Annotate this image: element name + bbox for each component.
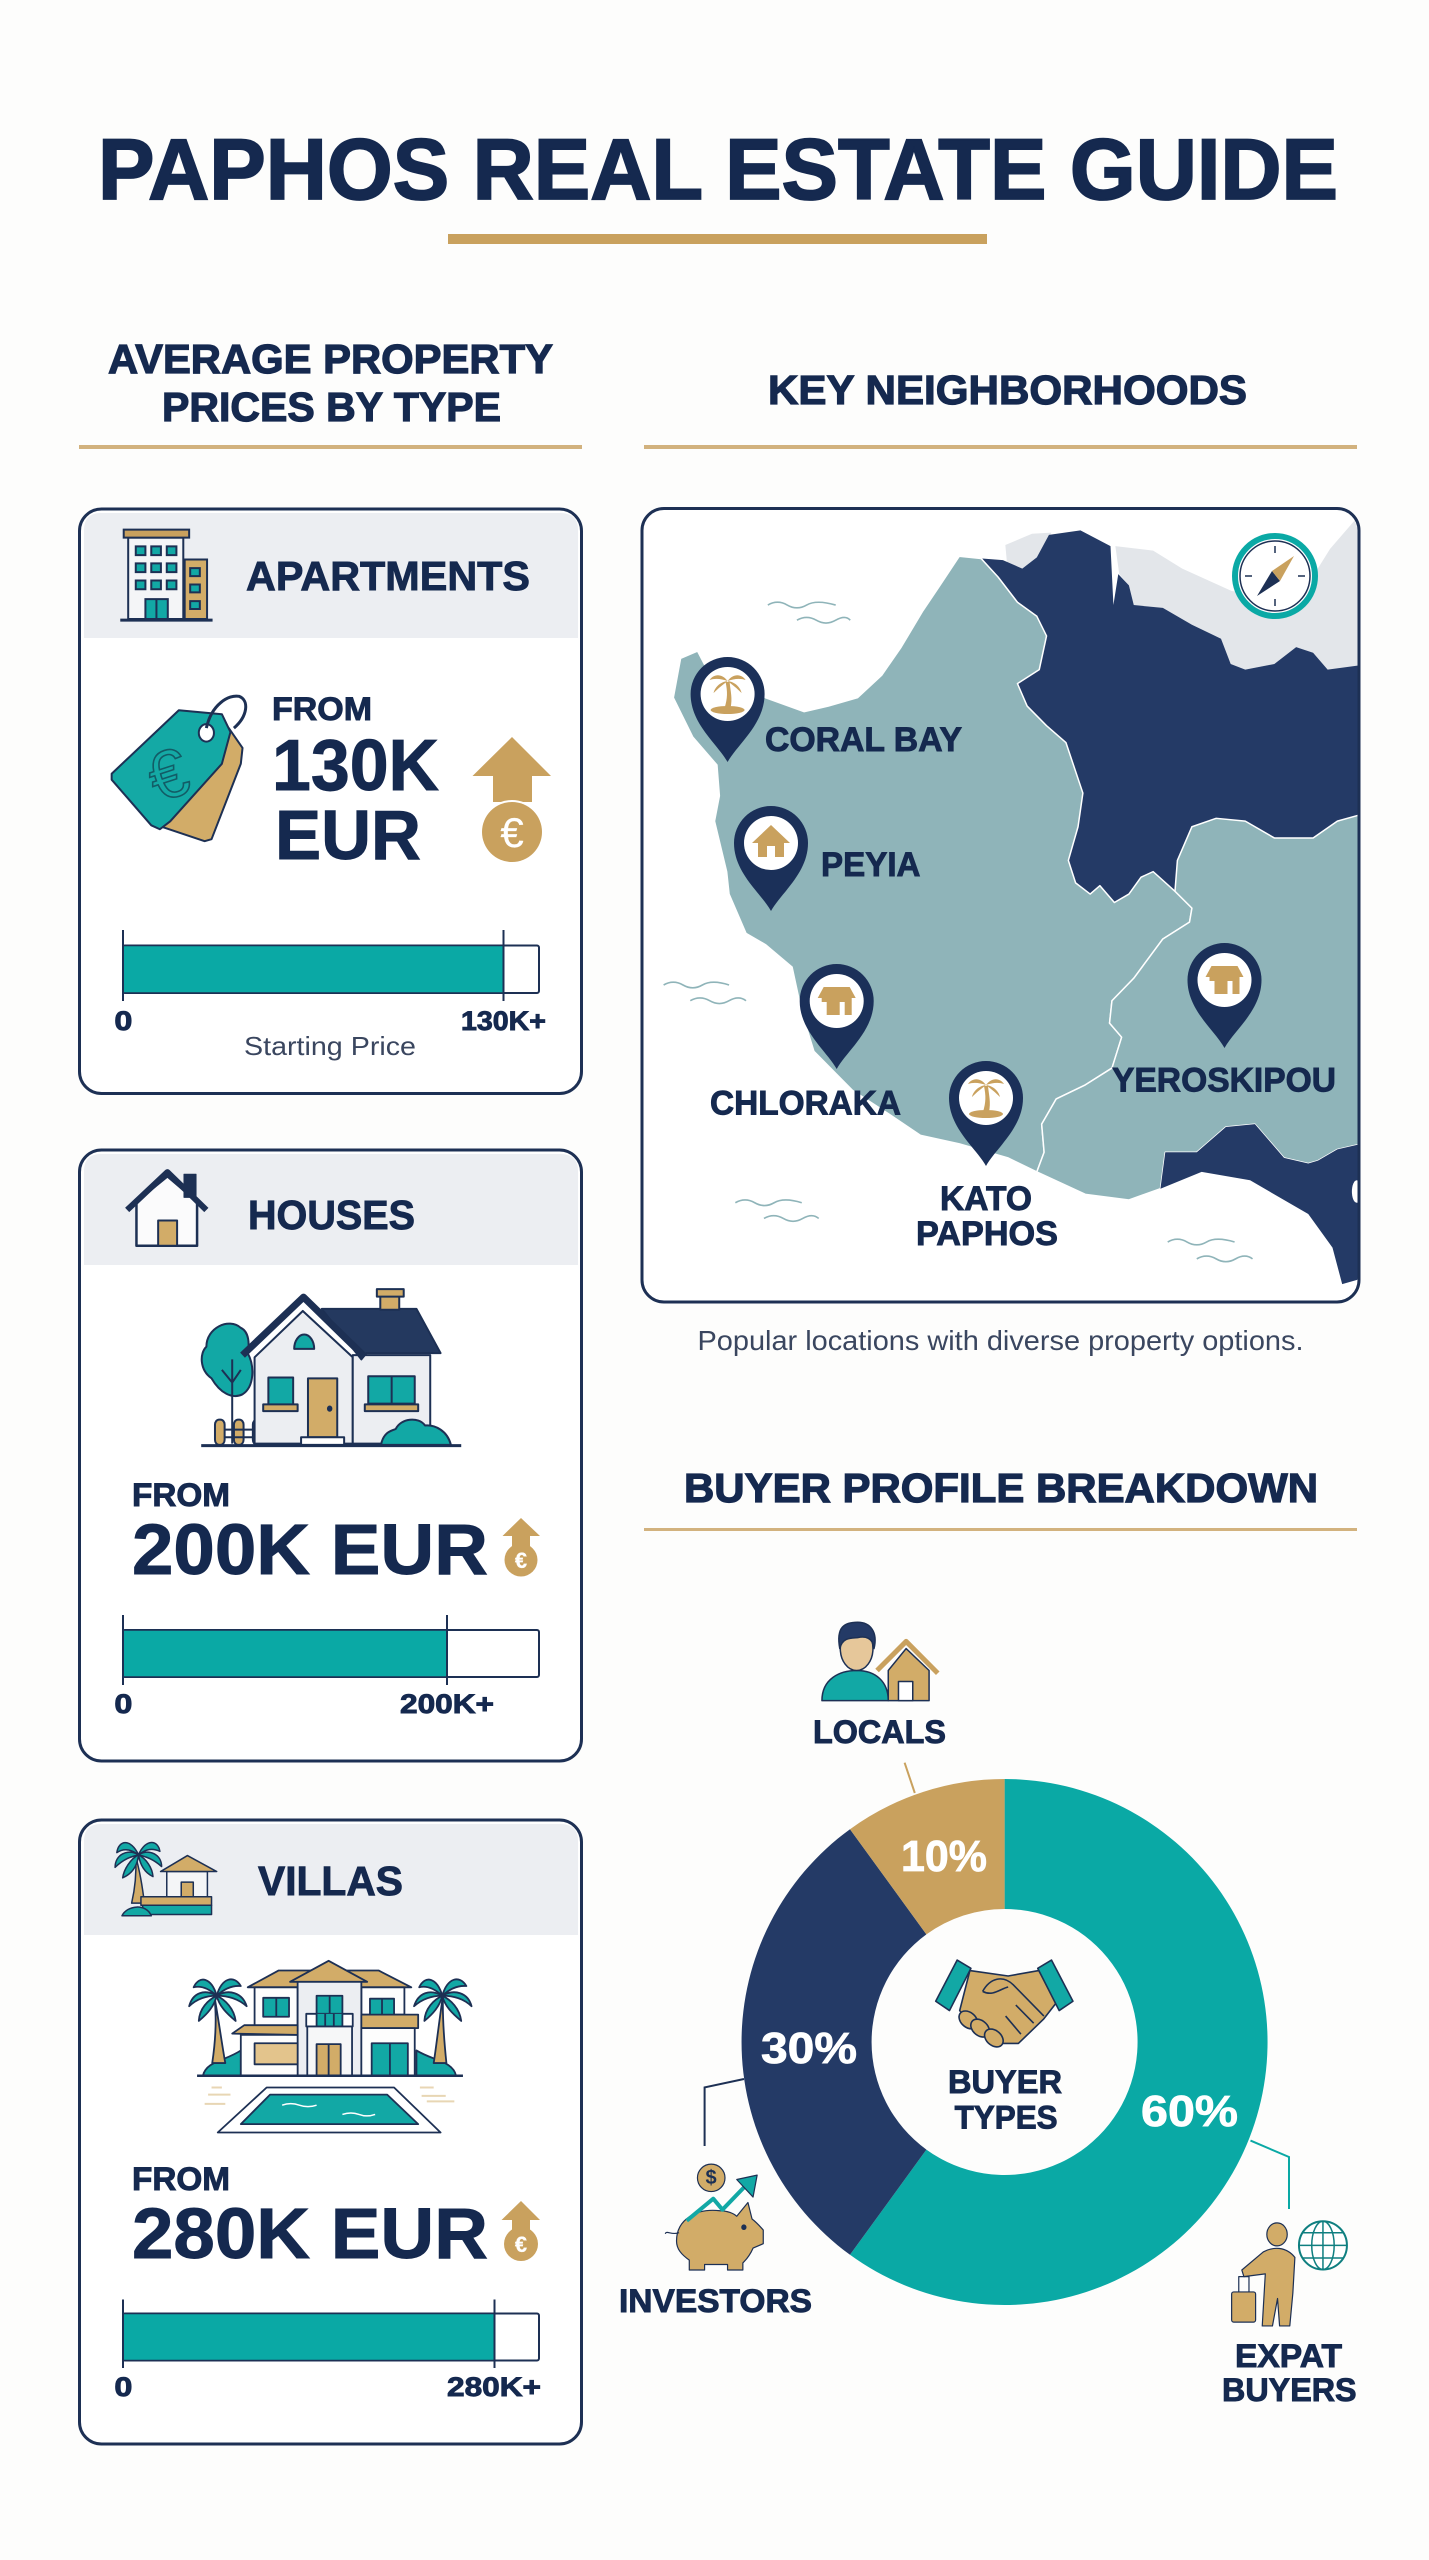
map regions — [664, 512, 1362, 1284]
panel: neighborhoods map — [642, 508, 1362, 1302]
bar chart: apartments: Starting Price — [244, 1031, 416, 1061]
percentage: 60%: 60% — [1141, 2087, 1238, 2136]
title underline — [448, 234, 987, 244]
heading: average property prices — [79, 336, 582, 449]
icon: price tags — [112, 696, 246, 841]
icon: small house — [127, 1172, 206, 1246]
price: from 200K EUR — [132, 1477, 488, 1590]
panel: villas — [80, 1820, 582, 2444]
villas label: VILLAS — [258, 1858, 403, 1904]
bar chart: villas: 0 — [114, 2372, 132, 2402]
label: kato paphos — [916, 1180, 1058, 1253]
label: peyia: PEYIA — [821, 846, 920, 884]
bar chart: apartments — [114, 930, 546, 1061]
heading: key neighborhoods: KEY NEIGHBORHOODS — [768, 367, 1247, 413]
callout: expat buyers: EXPAT — [1235, 2338, 1342, 2374]
icon: gold up arrow with euro coin — [472, 737, 551, 864]
callout: locals: LOCALS — [813, 1714, 946, 1750]
icon: traveller with suitcase and globe — [1232, 2221, 1347, 2326]
price: from 280K EUR — [132, 2161, 488, 2274]
icon: price tags: € — [139, 733, 198, 817]
percentage: 30%: 30% — [761, 2024, 857, 2073]
price: from 200K EUR: FROM — [132, 1477, 230, 1513]
houses label: HOUSES — [248, 1192, 415, 1238]
icon: small gold arrow with coin — [502, 1518, 540, 1576]
icon: apartment building — [120, 530, 213, 620]
callout: locals — [813, 1622, 946, 1793]
bar chart: houses: 200K+ — [400, 1689, 494, 1719]
price: from 280K EUR: 280K EUR — [132, 2195, 488, 2274]
callout: investors: INVESTORS — [619, 2283, 812, 2319]
icon: gold up arrow with euro coin: € — [500, 809, 524, 856]
pin: yeroskipou — [1188, 943, 1262, 1048]
bar chart: villas — [114, 2300, 541, 2402]
label: coral bay: CORAL BAY — [765, 721, 962, 759]
callout: expat buyers: BUYERS — [1222, 2372, 1357, 2408]
donut chart: buyer types — [742, 1779, 1268, 2305]
icon: handshake — [936, 1960, 1073, 2051]
price: from 130K EUR — [272, 691, 439, 874]
icon: piggy bank — [665, 2164, 763, 2270]
icon: small gold arrow with coin — [502, 2201, 540, 2261]
label: yeroskipou: YEROSKIPOU — [1112, 1062, 1336, 1100]
price: from 280K EUR: FROM — [132, 2161, 230, 2197]
center label: BUYER — [948, 2064, 1062, 2100]
label: chloraka: CHLORAKA — [710, 1084, 901, 1122]
callout: investors: $ — [705, 2167, 717, 2189]
heading: buyer profile breakdown: BUYER PROFILE BREAKDOWN — [684, 1465, 1318, 1511]
icon: villa with pool — [189, 1961, 472, 2133]
heading: average property prices: PRICES BY TYPE — [162, 384, 501, 430]
bar chart: apartments: 0 — [114, 1006, 132, 1036]
icon: compass — [1235, 536, 1315, 616]
icon: small gold arrow with coin: € — [515, 1548, 527, 1573]
title: PAPHOS REAL ESTATE GUIDE — [98, 122, 1338, 218]
price: from 200K EUR: 200K EUR — [132, 1511, 488, 1590]
callout: investors — [619, 2079, 812, 2319]
panel: apartments — [80, 509, 582, 1094]
bar chart: houses — [114, 1615, 539, 1719]
bar chart: apartments: 130K+ — [461, 1006, 546, 1036]
bar chart: houses: 0 — [114, 1689, 132, 1719]
label: kato paphos: KATO — [940, 1180, 1032, 1218]
icon: small villa with palm — [115, 1842, 217, 1916]
pin: peyia — [734, 806, 808, 911]
icon: detached house — [201, 1289, 461, 1446]
bar chart: villas: 280K+ — [447, 2372, 541, 2402]
price: from 130K EUR: EUR — [275, 796, 421, 874]
heading: buyer profile breakdown — [644, 1465, 1357, 1531]
callout: expat buyers — [1222, 2141, 1357, 2408]
icon: person with house — [822, 1622, 938, 1701]
pin: chloraka — [800, 964, 874, 1069]
pin: kato paphos — [949, 1061, 1023, 1166]
heading: average property prices: AVERAGE PROPERTY — [108, 336, 553, 382]
price: from 130K EUR: 130K — [272, 726, 439, 806]
center label — [948, 2064, 1062, 2136]
icon: small gold arrow with coin: € — [515, 2232, 527, 2257]
percentage: 10%: 10% — [901, 1832, 987, 1881]
map caption: Popular locations with diverse property options. — [698, 1325, 1304, 1356]
label: kato paphos: PAPHOS — [916, 1215, 1058, 1253]
pin: coral bay — [691, 657, 765, 762]
center label: TYPES — [955, 2100, 1058, 2136]
price: from 130K EUR: FROM — [272, 691, 372, 727]
heading: key neighborhoods — [644, 367, 1357, 449]
apartments label: APARTMENTS — [246, 553, 530, 599]
panel: houses — [80, 1150, 582, 1761]
